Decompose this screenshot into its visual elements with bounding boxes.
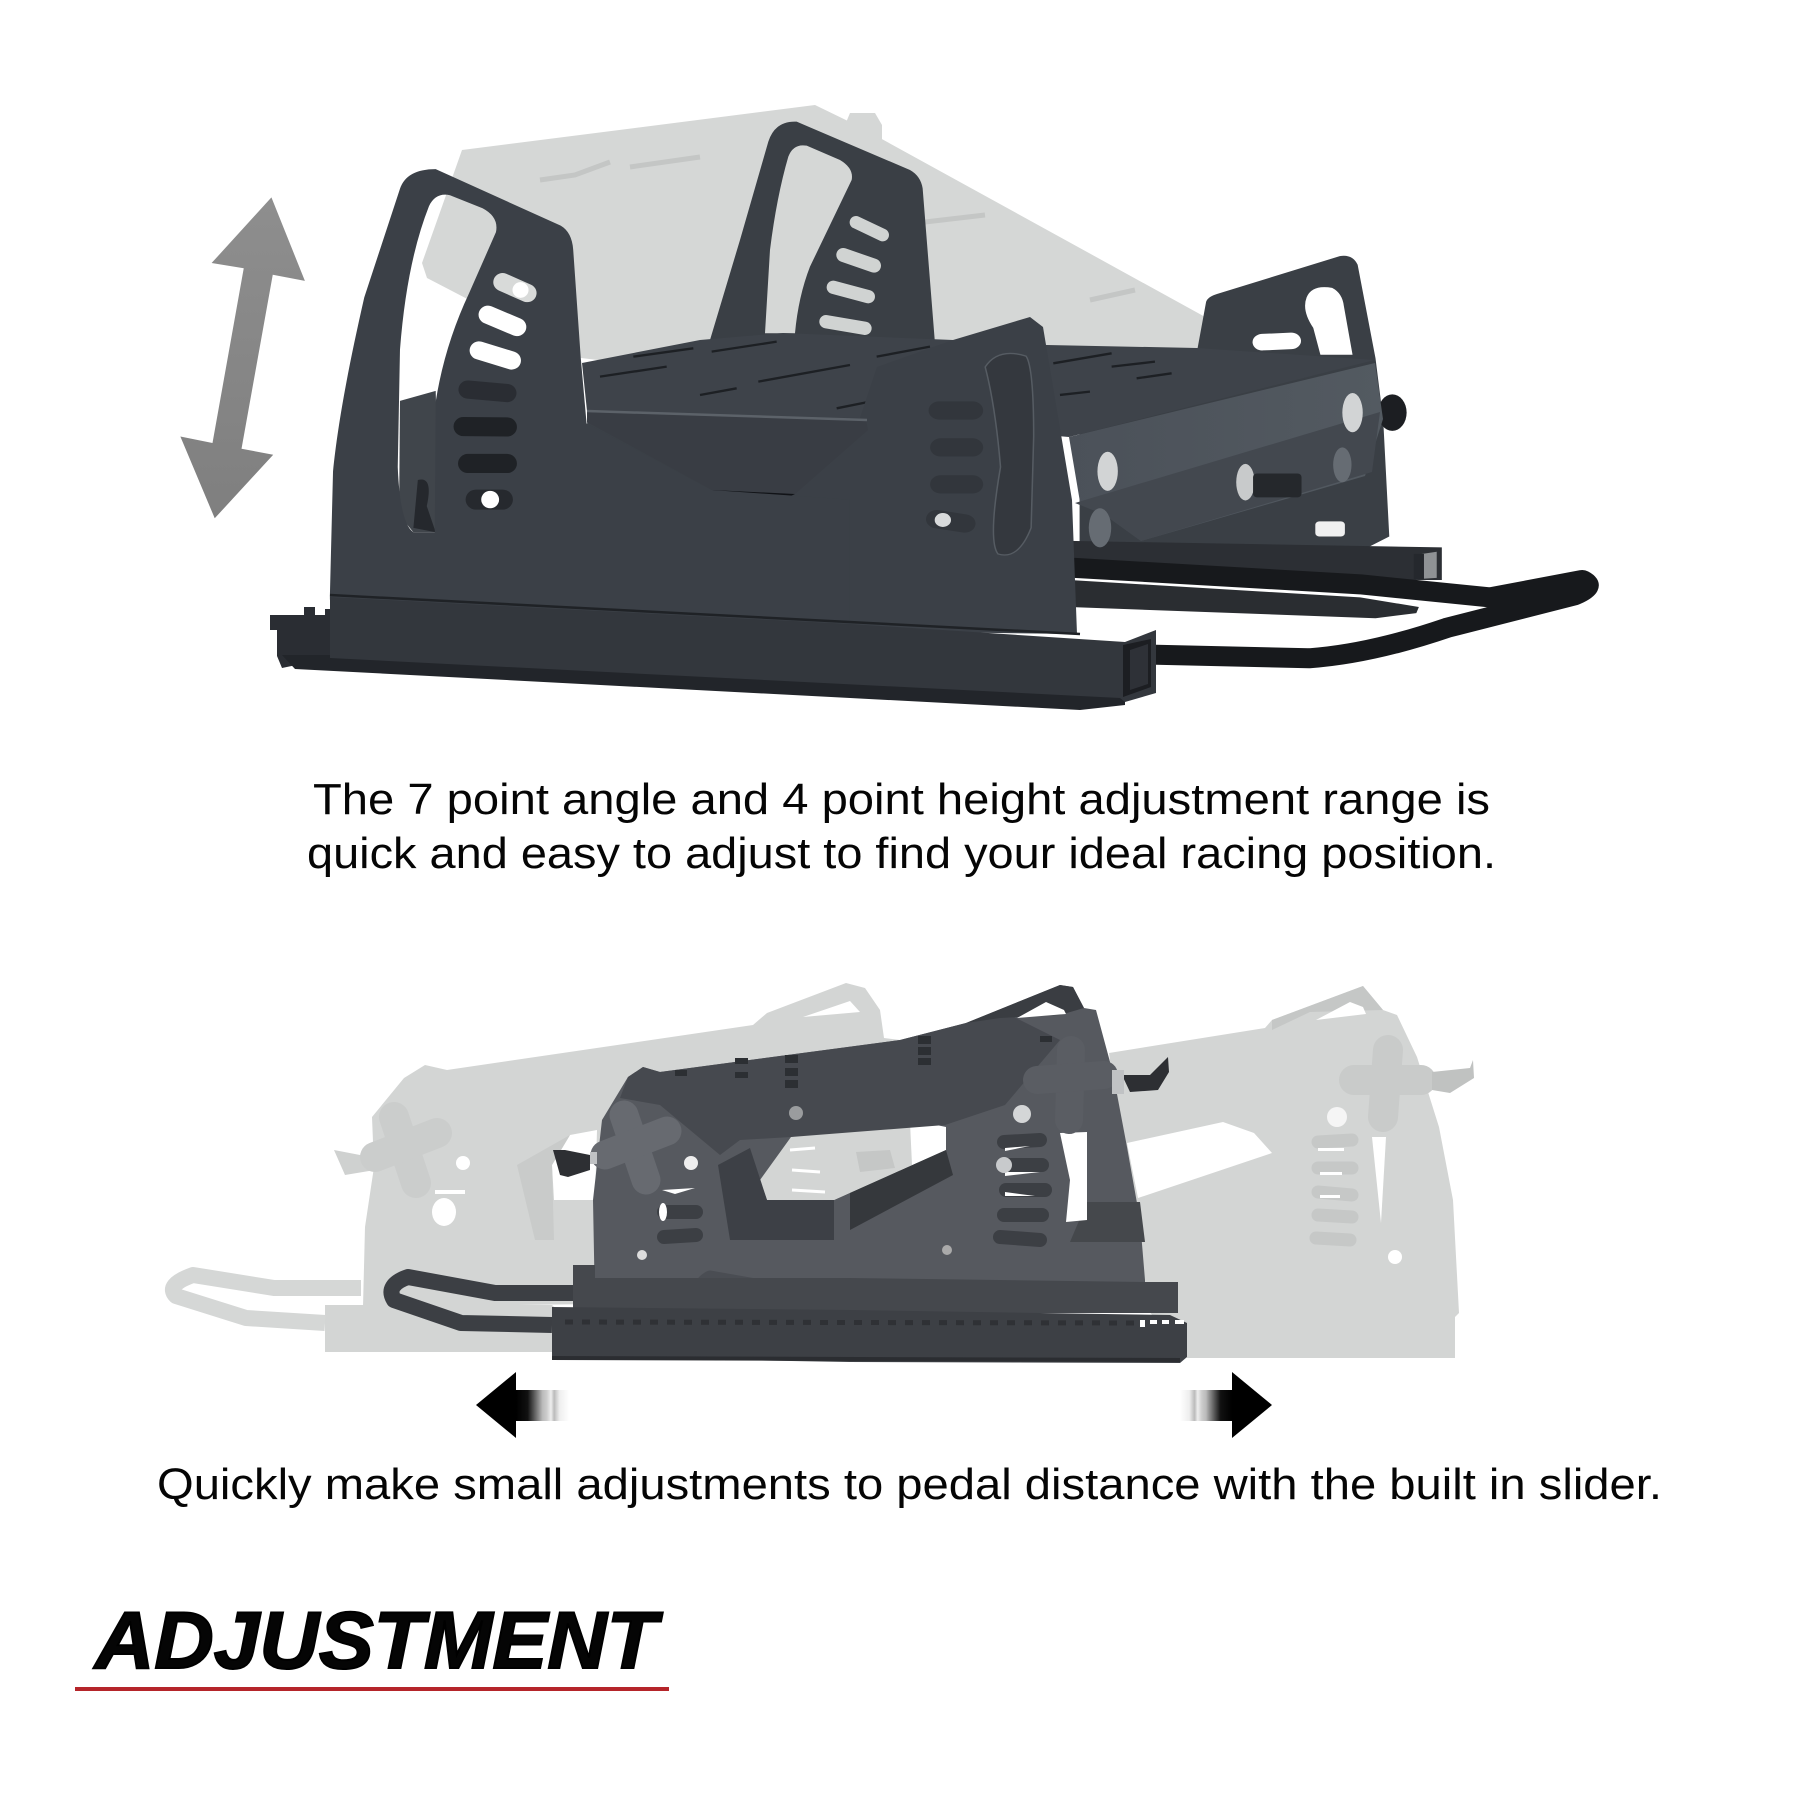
rear left bracket [710, 122, 935, 343]
centre dark tube [391, 1277, 581, 1325]
product: slider positions [173, 983, 1474, 1363]
side panel bolts [1089, 393, 1363, 547]
arrow: slide right [1180, 1372, 1272, 1438]
plate holes [675, 1036, 1052, 1088]
left ghost tube [173, 1275, 361, 1323]
bracket slot [1262, 341, 1291, 342]
back right bracket [1080, 256, 1407, 550]
rail end teeth [1140, 1320, 1184, 1327]
right ghost position [1109, 986, 1474, 1358]
centre right knob [1037, 1050, 1104, 1120]
left ghost position [173, 983, 900, 1352]
text block: height and angle adjustment: quick and easy to adjust to find your ideal racing position. [307, 829, 1496, 878]
text block: height and angle adjustment [307, 775, 1496, 878]
gusset opening [712, 490, 795, 508]
right ghost knob [1354, 1050, 1421, 1117]
centre plate top [620, 1015, 1060, 1155]
product: seat bracket with height adjustment [270, 105, 1587, 710]
title: ADJUSTMENT [93, 1596, 664, 1686]
text block: height and angle adjustment: The 7 point angle and 4 point height adjustment range is [313, 775, 1490, 824]
centre left knob [605, 1115, 667, 1180]
left ghost pin [334, 1150, 375, 1175]
side panel [1069, 363, 1383, 541]
arrow: slide left [476, 1372, 569, 1438]
right ghost window [1127, 1122, 1272, 1198]
rear rail and under plates [1069, 521, 1587, 658]
right ghost pin [1432, 1060, 1474, 1093]
right ghost slots [1316, 1140, 1352, 1240]
centre overlap shadows [718, 1148, 834, 1240]
top plate [582, 333, 1375, 437]
slide handle tube [1074, 568, 1587, 658]
centre bolts [684, 1156, 698, 1170]
centre dark position [391, 985, 1187, 1363]
angle slots [463, 282, 527, 500]
white hardware nut [1315, 521, 1345, 537]
front rail [270, 595, 1156, 710]
lower rail [552, 1307, 1187, 1363]
front left bracket [330, 169, 850, 628]
centre slots [664, 1140, 1045, 1240]
ghost raised plate [422, 105, 1207, 392]
plate front edge [587, 411, 867, 420]
front centre panel and right bracket [587, 317, 1077, 634]
bracket window interior [399, 391, 439, 532]
left ghost window [552, 1130, 597, 1200]
slim window [1060, 1132, 1087, 1222]
centre pins [553, 1150, 590, 1177]
plate slots [600, 342, 1172, 408]
text block: slider adjustment: Quickly make small adjustments to pedal distance with the built in slider. [157, 1460, 1662, 1509]
centre tube overlay [700, 1277, 900, 1318]
ghost seen through window [784, 1122, 912, 1200]
upper rail [573, 1265, 1178, 1313]
right bracket slots [935, 353, 1034, 555]
left ghost knob [375, 1117, 437, 1183]
rear knob [1378, 394, 1407, 431]
arrow: vertical height adjustment [180, 197, 305, 518]
